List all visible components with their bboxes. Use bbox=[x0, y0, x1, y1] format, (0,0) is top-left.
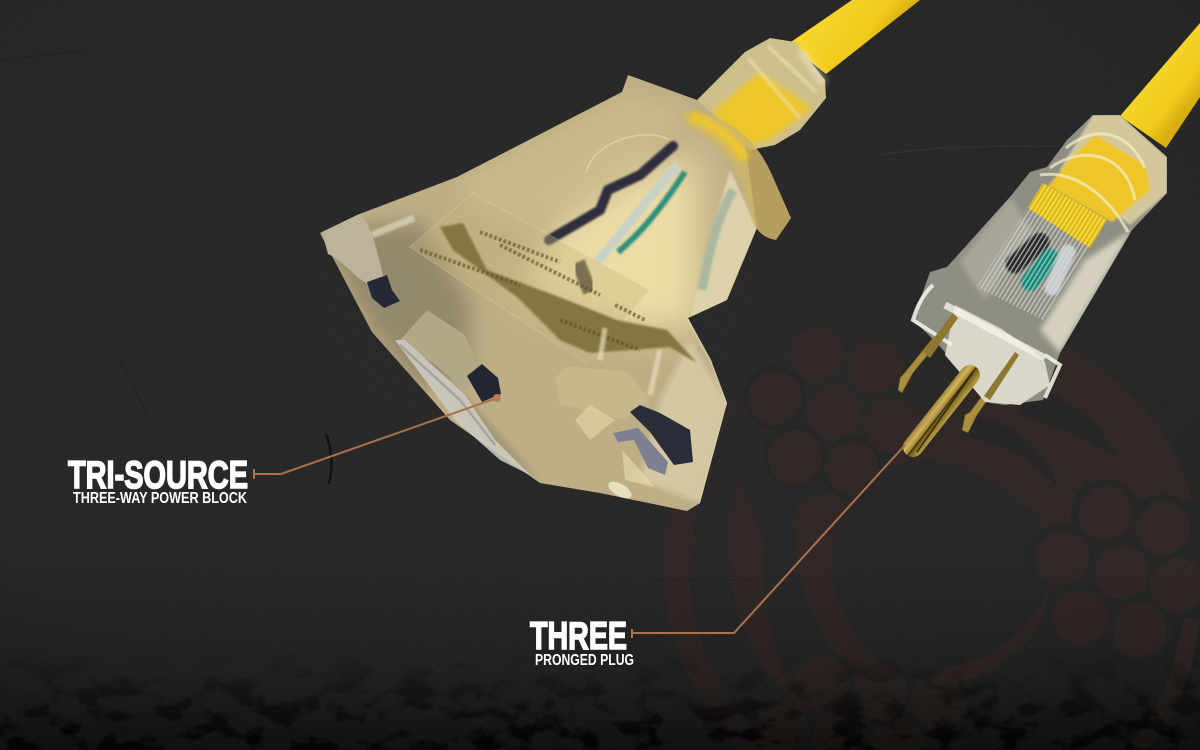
slot glints bbox=[575, 405, 615, 440]
lower right tone bbox=[640, 340, 727, 503]
product: three-prong plug bbox=[898, 115, 1167, 452]
cord exit circle outline bbox=[586, 135, 670, 174]
middle dark terminal block bbox=[467, 364, 501, 402]
block outer shell bbox=[320, 75, 757, 511]
third left crescent bbox=[796, 480, 892, 680]
plug highlights bbox=[960, 115, 1167, 353]
label: tri-source subheading: THREE-WAY POWER BLOCK bbox=[73, 490, 247, 507]
plug ground pin bbox=[913, 372, 973, 452]
lower left tone bbox=[462, 392, 533, 474]
label: tri-source heading: TRI-SOURCE bbox=[68, 454, 248, 497]
wires: black, teal, white bbox=[1015, 242, 1068, 288]
lower tab bbox=[606, 478, 634, 502]
lower right arc bbox=[1129, 617, 1199, 750]
soft tonal modelling inside shell bbox=[320, 95, 757, 503]
panel crease bbox=[688, 318, 727, 503]
outer left band bbox=[663, 395, 766, 750]
label: three heading: THREE bbox=[530, 615, 627, 658]
right socket dark terminal bbox=[630, 405, 693, 465]
teal reflection bbox=[702, 190, 733, 290]
product: tri-source power block bbox=[320, 38, 826, 511]
top strand cluster bbox=[748, 328, 919, 495]
mount flange bbox=[682, 112, 791, 240]
right strand cluster bbox=[1035, 486, 1200, 657]
blade roots over face bbox=[923, 313, 1019, 400]
plug face bbox=[945, 305, 1050, 405]
moulded lettering texture bbox=[420, 232, 645, 350]
top face tone bbox=[461, 91, 670, 220]
strain relief bristles bbox=[977, 183, 1107, 320]
callout: tri-source leader line bbox=[254, 394, 501, 479]
block collar with yellow core bbox=[697, 38, 826, 150]
green wire bbox=[618, 172, 685, 252]
wire terminal bbox=[578, 262, 590, 292]
blue-grey metal blade bbox=[613, 428, 668, 475]
plug collar ribs bbox=[1040, 134, 1145, 232]
bottom strand cluster bbox=[755, 656, 965, 750]
lit cone bbox=[520, 150, 700, 330]
white wire bbox=[597, 165, 678, 262]
dark sickles cut into the swath bbox=[743, 366, 1200, 662]
plug clear body bbox=[913, 115, 1167, 405]
left grey tone bbox=[320, 220, 470, 390]
left socket ground tab bbox=[322, 214, 384, 286]
plug right blade bbox=[962, 352, 1019, 433]
olive metal bus bar bbox=[440, 223, 697, 363]
label: three subheading: PRONGED PLUG bbox=[535, 652, 634, 669]
left face panel bbox=[395, 340, 530, 475]
second left crescent bbox=[728, 480, 808, 715]
plug yellow cable core bbox=[1048, 135, 1150, 222]
watermark logo: swirl with wire-strand circles bbox=[663, 328, 1200, 750]
right side panel bbox=[690, 170, 757, 318]
left dark terminal block bbox=[367, 275, 400, 308]
front socket blade housing bbox=[400, 310, 480, 390]
plug left blade bbox=[898, 313, 958, 393]
label plate bbox=[410, 193, 650, 363]
left pin reflection bbox=[372, 218, 414, 235]
callout: three leader line bbox=[632, 403, 943, 638]
black wire bbox=[549, 146, 673, 240]
yellow strain relief bristles bbox=[1028, 183, 1107, 248]
right socket pins bbox=[600, 328, 660, 395]
right socket housing bbox=[555, 366, 650, 420]
cord: right yellow cable bbox=[1120, 23, 1200, 148]
cord: left yellow cable bbox=[788, 0, 920, 74]
plug flange rim bbox=[913, 285, 1060, 398]
lower core crescent bbox=[929, 580, 1050, 685]
upper right swath bbox=[871, 345, 1192, 535]
